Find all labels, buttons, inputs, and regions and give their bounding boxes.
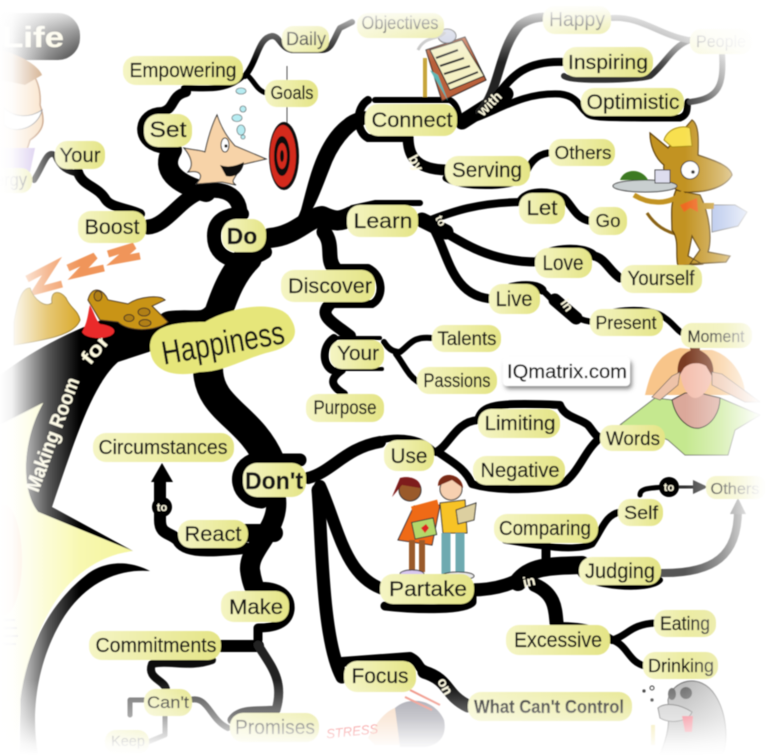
branch: Learn ring bbox=[352, 203, 420, 208]
icon: fish bbox=[184, 88, 266, 185]
label: Self bbox=[618, 499, 663, 526]
branch: Happiness to Don't bbox=[208, 368, 270, 462]
label: What Can't Control: What Can't Control bbox=[474, 697, 624, 717]
label: Let: Let bbox=[526, 197, 558, 220]
connector: to Self bbox=[659, 477, 679, 497]
tail bbox=[647, 213, 680, 235]
label: Drinking: Drinking bbox=[648, 656, 714, 676]
label: Goals bbox=[265, 80, 318, 107]
label: Do bbox=[222, 219, 266, 252]
label: Commitments: Commitments bbox=[96, 635, 216, 657]
panel: left black branch with yellow burst bbox=[0, 305, 170, 755]
label: What Can't Control bbox=[468, 692, 632, 721]
sleeve bbox=[712, 205, 747, 232]
connector: in Partake: in bbox=[521, 572, 537, 590]
label: Live: Live bbox=[496, 288, 532, 311]
label: Focus bbox=[344, 661, 416, 692]
label: Live bbox=[489, 284, 540, 314]
branch: in to Excessive bbox=[535, 585, 557, 626]
label: Purpose: Purpose bbox=[314, 398, 376, 419]
branch: Learn to Discover bbox=[324, 232, 334, 268]
label: Focus: Focus bbox=[352, 665, 408, 688]
label: Serving: Serving bbox=[452, 159, 522, 182]
branch: React underline and arrow stem bbox=[160, 480, 245, 550]
label: Others serving bbox=[549, 139, 615, 166]
branch: Connect to Optimistic bbox=[460, 94, 688, 122]
label: Negative bbox=[473, 456, 565, 485]
connector: to React: to bbox=[157, 502, 167, 514]
label: Don't: Don't bbox=[245, 468, 303, 495]
branch: Use to Limiting bbox=[436, 404, 602, 452]
arm and tray bbox=[634, 192, 684, 202]
icon: woman with headache bbox=[620, 343, 760, 455]
label: Eating bbox=[654, 610, 716, 637]
label: Happiness: Happiness bbox=[159, 314, 287, 371]
label: Love: Love bbox=[542, 252, 584, 275]
icon: two children bbox=[392, 475, 476, 580]
label: Limiting: Limiting bbox=[484, 413, 556, 435]
icon: stressed person bbox=[326, 690, 445, 747]
label: Purpose bbox=[306, 394, 384, 422]
branch: Connect to Inspiring bbox=[490, 62, 565, 104]
label: React: React bbox=[184, 523, 242, 546]
branch: Empowering to Goals bbox=[246, 74, 266, 93]
icon: arrow head right bbox=[693, 480, 708, 494]
label: Goals: Goals bbox=[270, 83, 314, 103]
panel: Life badge bbox=[0, 13, 80, 60]
branch: to arrow line bbox=[670, 486, 698, 488]
panel: left black branch with yellow burst: for bbox=[77, 330, 115, 369]
branch: Connect to Happy bbox=[480, 17, 548, 112]
label: Others arrow bbox=[706, 476, 766, 499]
label: Set bbox=[144, 114, 192, 147]
branch: Make to Commitments bbox=[218, 640, 258, 652]
branch: Empowering underline bbox=[184, 76, 243, 88]
branch: Make to Promises bbox=[232, 645, 279, 720]
label: Partake: Partake bbox=[389, 578, 467, 601]
branch: Don't to Partake bbox=[320, 486, 395, 592]
connector: in Live: in bbox=[558, 296, 576, 314]
label: Others serving: Others bbox=[554, 143, 612, 163]
eye bbox=[681, 161, 699, 179]
label: Present: Present bbox=[596, 313, 656, 333]
label: Can't: Can't bbox=[147, 693, 189, 712]
label: Your left: Your bbox=[60, 145, 101, 167]
branch: Inspiring to People bbox=[564, 40, 690, 80]
panel: Life badge: Life bbox=[2, 22, 64, 54]
label: Negative: Negative bbox=[480, 460, 560, 482]
label: Eating: Eating bbox=[660, 614, 710, 635]
label: Learn: Learn bbox=[354, 210, 412, 233]
label: Talents bbox=[432, 325, 501, 352]
connector: to React bbox=[152, 497, 172, 517]
label: Your centre bbox=[330, 340, 384, 369]
branch: Do to Set bbox=[168, 150, 206, 192]
branch: Your ring bbox=[325, 338, 334, 370]
label: Boost bbox=[78, 211, 146, 243]
branch: Use to Negative bbox=[438, 438, 600, 489]
branch: Your to Talents bbox=[384, 338, 432, 352]
label: Happy bbox=[543, 6, 611, 34]
branch: Connect top bbox=[375, 100, 462, 122]
hair bbox=[664, 127, 692, 147]
branch: with wedge bbox=[462, 94, 506, 122]
label: Present bbox=[590, 309, 663, 336]
label: Empowering: Empowering bbox=[130, 60, 236, 82]
label: Your left bbox=[55, 141, 105, 169]
branch: Learn to Live bbox=[432, 226, 542, 299]
label: Optimistic: Optimistic bbox=[586, 91, 680, 114]
watermark: IQmatrix.com: IQmatrix.com bbox=[507, 362, 627, 383]
connector: to Learn: to bbox=[432, 214, 448, 229]
branch: Don't ring bbox=[239, 460, 300, 502]
label: Set: Set bbox=[150, 117, 186, 142]
branch: Do ring bbox=[214, 214, 265, 260]
branch: to wedge bbox=[422, 220, 446, 232]
icon: arrow head up bbox=[151, 463, 173, 482]
label: Words: Words bbox=[606, 429, 660, 450]
label: Love bbox=[535, 248, 592, 278]
label: Others arrow: Others bbox=[710, 481, 760, 498]
branch: Learn to Let bbox=[425, 192, 590, 222]
label: Daily bbox=[282, 26, 329, 52]
connector: to Self: to bbox=[664, 482, 674, 494]
label: Serving bbox=[445, 156, 530, 186]
branch: in to Comparing bbox=[542, 540, 550, 560]
branch: Don't to Make bbox=[250, 498, 276, 596]
branch: Do to Boost bbox=[148, 190, 240, 227]
icon: arrow head to Others bbox=[730, 498, 746, 514]
label: Use: Use bbox=[390, 445, 428, 468]
branch: Learn to Love bbox=[425, 222, 620, 278]
label: Limiting bbox=[478, 409, 560, 438]
label: Make bbox=[221, 591, 289, 622]
branch: Make ring bbox=[250, 586, 290, 640]
label: Do: Do bbox=[227, 223, 257, 249]
label: Passions bbox=[417, 367, 497, 394]
branch: Commitments underline to Can't bbox=[151, 660, 212, 692]
icon: waiter mouse bbox=[613, 120, 747, 266]
label: Learn bbox=[347, 205, 418, 237]
label: Drinking bbox=[643, 652, 718, 679]
label: Discover: Discover bbox=[288, 275, 372, 298]
label: Your centre: Your bbox=[337, 343, 379, 365]
branch: Set ring bbox=[142, 92, 186, 148]
label: Excessive: Excessive bbox=[514, 629, 602, 652]
branch: React to Don't bbox=[238, 524, 274, 542]
branch: Self to circle bbox=[640, 487, 665, 495]
branch: Don't to Focus bbox=[318, 490, 342, 677]
label: People bbox=[690, 29, 752, 54]
branch: Do to Connect bbox=[268, 112, 370, 243]
connector word circles bbox=[152, 88, 679, 698]
label: Keep: Keep bbox=[111, 733, 145, 750]
label: Connect bbox=[365, 104, 457, 136]
label: Making Room for: Making Room bbox=[22, 375, 85, 495]
label: Discover bbox=[281, 270, 375, 302]
label: Talents: Talents bbox=[438, 329, 496, 350]
branch: Judging underline bbox=[580, 572, 660, 587]
label: Boost: Boost bbox=[84, 216, 140, 239]
label: Moment: Moment bbox=[688, 327, 745, 346]
connector: with: with bbox=[473, 88, 505, 120]
icon: clipboard bbox=[418, 29, 486, 101]
label: Connect: Connect bbox=[372, 109, 453, 132]
branch: Happy to People bbox=[612, 18, 688, 40]
icon: drunk seal bbox=[642, 681, 726, 755]
label: Excessive bbox=[506, 625, 610, 655]
branch: Do to Learn bbox=[270, 216, 352, 238]
label: Passions: Passions bbox=[424, 371, 490, 392]
icon: stressed person: STRESS bbox=[326, 721, 379, 741]
branch: Judging arrow bbox=[660, 510, 738, 573]
label: Keep bbox=[105, 730, 149, 754]
branch: Your to Passions bbox=[396, 354, 420, 383]
branch: Boost to Your bbox=[78, 172, 140, 214]
label: Inspiring bbox=[563, 47, 653, 77]
icon: target bbox=[269, 66, 299, 190]
branch: Comparing underline bbox=[505, 512, 620, 548]
label: Comparing: Comparing bbox=[499, 518, 591, 540]
branch: Can't to Promises bbox=[190, 699, 228, 728]
branch: Happiness to Do bbox=[170, 258, 248, 325]
watermark: IQmatrix.com bbox=[503, 357, 632, 389]
label: Go: Go bbox=[596, 211, 620, 231]
label: Self: Self bbox=[624, 503, 659, 523]
branch: Don't to Use bbox=[308, 442, 380, 478]
bow tie bbox=[680, 198, 698, 212]
icon: sleeping dog bbox=[14, 288, 168, 345]
branch: Optimistic to People bbox=[690, 52, 722, 102]
branch: Empowering to Daily bbox=[245, 22, 352, 76]
branch: Connect ring bbox=[359, 100, 404, 138]
label: Let bbox=[519, 193, 565, 224]
label: Objectives: Objectives bbox=[362, 13, 438, 33]
connector: on: on bbox=[434, 675, 457, 698]
label: Yourself: Yourself bbox=[628, 268, 695, 290]
label: Inspiring: Inspiring bbox=[568, 52, 648, 74]
label: Words bbox=[600, 425, 665, 451]
label: Moment bbox=[681, 323, 752, 348]
branch: in wedge bbox=[555, 300, 576, 318]
label: Daily: Daily bbox=[286, 29, 326, 49]
branch: Can't to Keep bbox=[130, 700, 165, 742]
branch: Excessive to Drinking bbox=[612, 640, 645, 666]
label: Can't bbox=[144, 689, 192, 716]
icon: ZZZ bbox=[27, 246, 140, 291]
label: Make: Make bbox=[229, 596, 283, 619]
branch: Excessive to Eating bbox=[612, 623, 656, 640]
label: Circumstances: Circumstances bbox=[98, 437, 228, 459]
label: React bbox=[178, 520, 248, 548]
label: Yourself bbox=[621, 265, 702, 293]
branch: Partake to in bbox=[470, 574, 530, 590]
label: Use bbox=[384, 440, 434, 471]
icon: hand at left edge bbox=[3, 620, 18, 644]
branch: Partake underline bbox=[385, 592, 472, 609]
label: Judging: Judging bbox=[585, 560, 655, 583]
label: Promises: Promises bbox=[235, 717, 315, 739]
label: Happy: Happy bbox=[549, 9, 605, 31]
branch: Focus to on bbox=[424, 672, 468, 706]
label: People: People bbox=[696, 32, 746, 51]
label: Go bbox=[589, 207, 627, 235]
branch: Connect by Serving bbox=[408, 136, 448, 170]
body and legs bbox=[672, 190, 730, 266]
ears and head bbox=[650, 120, 732, 192]
connector: by: by bbox=[405, 152, 427, 174]
label: Partake bbox=[380, 574, 474, 604]
icon: cartoon man bbox=[0, 50, 43, 172]
